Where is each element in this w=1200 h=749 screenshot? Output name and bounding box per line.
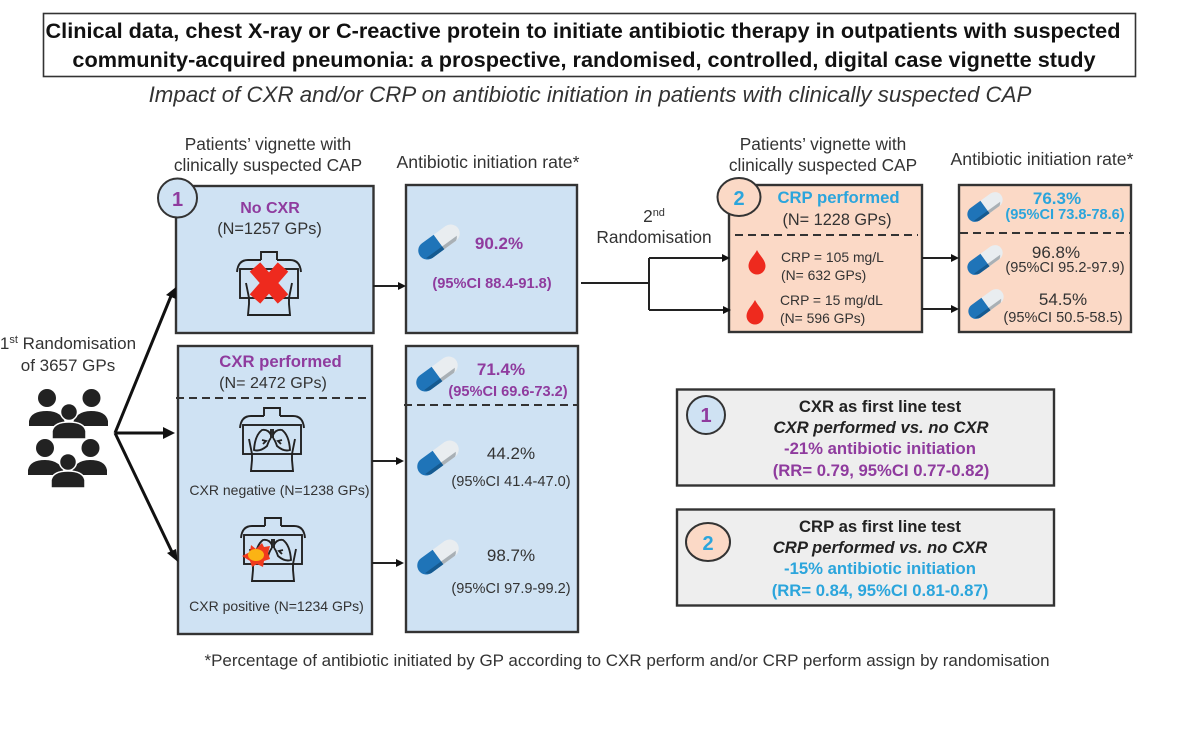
- icon: group of GPs: [28, 389, 108, 488]
- first randomisation label: Randomisation: [18, 334, 136, 353]
- panel: rate CRP: 96.8%: [1032, 243, 1080, 262]
- summary panel: CRP: CRP as first line test: [799, 517, 961, 536]
- panel: CRP performed: (N= 596 GPs): [780, 310, 865, 326]
- subtitle: Impact of CXR and/or CRP on antibiotic initiation in patients with clinically suspected CAP: [149, 82, 1032, 107]
- summary panel: CRP: CRP performed vs. no CXR: [773, 538, 987, 557]
- panel: no CXR: No CXR: [240, 200, 300, 217]
- panel: rate no CXR: 90.2%: [475, 234, 523, 253]
- panel: rate no CXR: (95%CI 88.4-91.8): [432, 276, 552, 292]
- icon: clear chest X-ray: [240, 408, 304, 471]
- icon: pill: [414, 437, 462, 479]
- arrows: second randomisation: [581, 254, 731, 314]
- badge 1: 1: [700, 405, 712, 427]
- first randomisation label: st: [9, 334, 18, 346]
- arrows: first randomisation: [115, 287, 178, 562]
- footnote: *Percentage of antibiotic initiated by GP according to CXR perform and/or CRP perform assign by randomisation: [204, 651, 1050, 670]
- first randomisation label: 1: [0, 334, 9, 353]
- badge 2: 2: [733, 188, 745, 210]
- summary panel: CXR: CXR performed vs. no CXR: [773, 418, 989, 437]
- column heading: vignette 1: [174, 134, 362, 175]
- arrows: CRP to antibiotic: [922, 254, 959, 313]
- icon: pill: [965, 286, 1007, 322]
- panel: rate CXR: (95%CI 41.4-47.0): [451, 474, 571, 490]
- panel: rate CRP: (95%CI 73.8-78.6): [1005, 207, 1125, 223]
- panel: CXR performed: CXR negative (N=1238 GPs): [189, 482, 370, 498]
- second randomisation label: nd: [653, 207, 665, 219]
- title: community-acquired pneumonia: a prospective, randomised, controlled, digital case vignette study: [72, 47, 1096, 72]
- second randomisation label: Randomisation: [596, 227, 712, 247]
- panel: CRP performed: [729, 185, 922, 332]
- column heading: antibiotic rate 2: Antibiotic initiation rate*: [951, 149, 1134, 169]
- icon: chest X-ray with opacity: [241, 518, 305, 581]
- icon: chest crossed out: [237, 252, 301, 315]
- panel: CXR performed: CXR performed: [219, 352, 342, 371]
- summary panel: CRP: -15% antibiotic initiation: [784, 559, 976, 578]
- title: Clinical data, chest X-ray or C-reactive protein to initiate antibiotic therapy in outpatients with suspected: [46, 18, 1120, 43]
- column heading: vignette 2: Patients’ vignette with: [740, 134, 906, 154]
- panel: CRP performed: (N= 632 GPs): [781, 267, 866, 283]
- panel: rate CRP: 54.5%: [1039, 290, 1087, 309]
- summary panel: CXR: -21% antibiotic initiation: [784, 439, 976, 458]
- column heading: vignette 1: clinically suspected CAP: [174, 155, 362, 175]
- panel: rate CXR: (95%CI 97.9-99.2): [451, 581, 571, 597]
- arrows: CXR to antibiotic: [372, 282, 406, 567]
- badge 1: [158, 178, 197, 218]
- column heading: antibiotic rate 1: Antibiotic initiation rate*: [397, 152, 580, 172]
- panel: no CXR: [176, 186, 374, 333]
- badge 1: [687, 396, 725, 434]
- title: [44, 14, 1136, 76]
- icon: pill: [413, 353, 461, 395]
- first randomisation label: of 3657 GPs: [21, 356, 115, 375]
- summary panel: CXR: CXR as first line test: [799, 397, 962, 416]
- icon: blood drop: [748, 250, 766, 274]
- summary panel: CRP: [677, 510, 1054, 606]
- icon: blood drop: [746, 300, 764, 324]
- summary panel: CXR: (RR= 0.79, 95%CI 0.77-0.82): [773, 461, 989, 480]
- panel: rate CRP: [959, 185, 1131, 332]
- panel: rate CXR: 44.2%: [487, 444, 535, 463]
- panel: CRP performed: CRP = 15 mg/dL: [780, 292, 883, 308]
- panel: rate CRP: (95%CI 95.2-97.9): [1005, 260, 1125, 276]
- panel: CRP performed: (N= 1228 GPs): [782, 211, 892, 229]
- icon: pill: [414, 536, 462, 578]
- panel: CRP performed: CRP performed: [777, 188, 900, 207]
- badge 2: [686, 523, 730, 561]
- panel: CRP performed: CRP = 105 mg/L: [781, 249, 884, 265]
- second randomisation label: [596, 206, 712, 247]
- panel: rate CXR: 98.7%: [487, 546, 535, 565]
- panel: rate no CXR: [406, 185, 577, 333]
- icon: pill: [964, 189, 1006, 225]
- panel: rate CRP: (95%CI 50.5-58.5): [1003, 310, 1123, 326]
- column heading: vignette 2: [729, 134, 917, 175]
- panel: CXR performed: CXR positive (N=1234 GPs): [189, 598, 364, 614]
- icon: pill: [964, 242, 1006, 278]
- panel: CXR performed: (N= 2472 GPs): [219, 374, 327, 392]
- column heading: vignette 1: Patients’ vignette with: [185, 134, 351, 154]
- summary panel: CXR: [677, 390, 1054, 486]
- badge 2: 2: [702, 533, 714, 555]
- panel: rate CXR: [404, 346, 578, 632]
- panel: CXR performed: [176, 346, 372, 634]
- badge 2: [718, 178, 760, 216]
- badge 1: 1: [172, 189, 183, 211]
- summary panel: CRP: (RR= 0.84, 95%CI 0.81-0.87): [772, 581, 988, 600]
- panel: rate CRP: 76.3%: [1033, 189, 1081, 208]
- first randomisation label: [0, 334, 136, 375]
- column heading: vignette 2: clinically suspected CAP: [729, 155, 917, 175]
- panel: rate CXR: 71.4%: [477, 360, 525, 379]
- panel: no CXR: (N=1257 GPs): [217, 220, 322, 238]
- panel: rate CXR: (95%CI 69.6-73.2): [448, 384, 568, 400]
- second randomisation label: 2: [643, 206, 653, 226]
- icon: pill: [415, 221, 463, 263]
